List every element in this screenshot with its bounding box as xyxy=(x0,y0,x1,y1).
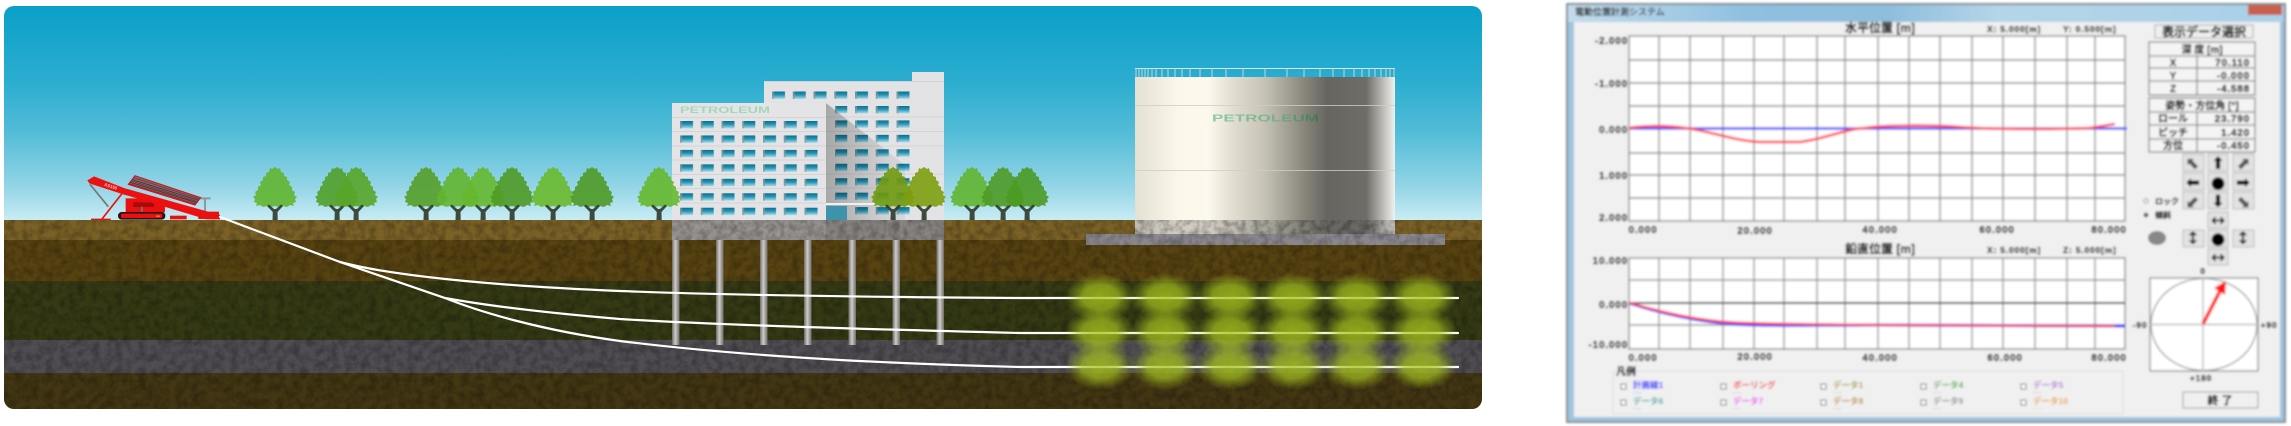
legend: series labels: データ9 xyxy=(1933,396,1964,406)
controls: arrow glyphs: ⬅ xyxy=(2186,173,2200,193)
chart 2: x axis labels: 0.000 xyxy=(1628,353,1658,364)
controls: arrow glyphs: ● xyxy=(2211,173,2225,193)
chart 1: x axis labels: 60.000 xyxy=(1979,225,2015,236)
panel: drilling cross-section scene xyxy=(4,6,1482,409)
side panel: mode radio options: 傾斜 xyxy=(2155,210,2171,220)
legend: series labels: 計画線1 xyxy=(1633,380,1664,390)
compass: bearing labels xyxy=(2133,266,2277,383)
side panel: attitude table: 方位 xyxy=(2163,139,2183,152)
legend: series sub-labels: ----- xyxy=(1833,390,1842,396)
side panel: attitude table: 23.790 xyxy=(2215,114,2250,125)
trees xyxy=(253,167,1049,220)
controls: arrow glyphs: ↕ xyxy=(2236,229,2250,249)
soil layer: dark green stratum xyxy=(4,281,1482,340)
building: office block on piles xyxy=(672,72,944,345)
compass: heading arrow xyxy=(2203,281,2226,324)
legend: series sub-labels: ----- xyxy=(1933,390,1942,396)
side panel: depth table: Z xyxy=(2170,84,2176,95)
storage tank xyxy=(1086,68,1445,245)
controls: arrow glyphs: ⬇ xyxy=(2211,192,2225,212)
legend: series labels: データ4 xyxy=(1933,380,1964,390)
chart 2: y axis labels xyxy=(1588,256,1628,351)
controls: arrow glyphs: ↔ xyxy=(2211,211,2225,231)
window: title bar xyxy=(1568,5,2284,22)
chart 2: x axis labels: 20.000 xyxy=(1737,352,1773,363)
chart 2: measured line xyxy=(1629,302,2115,326)
panel: monitoring software window screenshot xyxy=(1567,4,2285,422)
chart 1: measured line xyxy=(1629,124,2115,142)
well 1: upper bore xyxy=(220,217,1458,298)
chart 1: scale readout: X: 5.000[m] xyxy=(1987,24,2041,34)
compass: bearing labels: -90 xyxy=(2133,320,2147,330)
rig: model lettering: AS150 xyxy=(104,182,118,191)
chart: horizontal position xyxy=(1595,20,2127,237)
rig: crawler track xyxy=(118,212,165,220)
window: frame xyxy=(1567,4,2285,422)
controls: arrow glyphs: ⬋ xyxy=(2186,192,2200,212)
window: title text: 電動位置計測システム xyxy=(1575,6,1665,17)
legend: series labels: データ8 xyxy=(1833,396,1864,406)
legend: series sub-labels: ----- xyxy=(1833,406,1842,412)
tank: PETROLEUM label: PETROLEUM xyxy=(1212,112,1319,124)
legend: series labels: データ7 xyxy=(1733,396,1764,406)
compass dial xyxy=(2133,266,2277,383)
side panel: depth table: -4.588 xyxy=(2217,84,2250,95)
soil layer: grey rock xyxy=(4,340,1482,373)
legend: series labels: データ1 xyxy=(1833,380,1864,390)
controls: rotate icon xyxy=(2148,231,2166,245)
compass: bearing labels: +90 xyxy=(2261,320,2277,330)
chart 1: x axis labels: 0.000 xyxy=(1628,225,1658,236)
legend xyxy=(1613,365,2123,414)
legend: series sub-labels: ----- xyxy=(1733,390,1742,396)
legend: series sub-labels: ----- xyxy=(1933,406,1942,412)
tank: cylinder body xyxy=(1135,77,1395,220)
chart 1: second scale readout: Y: 0.500[m] xyxy=(2063,24,2117,34)
side panel: depth table: X xyxy=(2170,58,2177,69)
legend: checkboxes xyxy=(1621,384,2026,405)
legend: series sub-labels: ----- xyxy=(2033,406,2042,412)
tank: concrete plinth xyxy=(1135,220,1395,234)
chart 1: y axis labels: -1.000 xyxy=(1595,79,1628,90)
finish button xyxy=(2183,392,2258,408)
chart 2: x axis labels xyxy=(1628,352,2127,364)
chart 2: y axis labels: -10.000 xyxy=(1588,340,1628,351)
controls: arrow glyphs xyxy=(2186,154,2250,268)
chart 2: plot area xyxy=(1629,258,2125,349)
chart 1: title: 水平位置 [m] xyxy=(1845,20,1915,35)
controls: arrow glyphs: ➡ xyxy=(2236,173,2250,193)
chart 1: x axis labels: 40.000 xyxy=(1862,225,1898,236)
controls: arrow glyphs: ⬈ xyxy=(2236,154,2250,174)
legend: series sub-labels xyxy=(1633,390,2042,412)
chart 1: planned line xyxy=(1629,127,2127,130)
rig: body xyxy=(126,198,165,212)
legend: heading: 凡例 xyxy=(1616,365,1636,378)
legend: series labels: データ10 xyxy=(2033,396,2068,406)
controls: arrow glyphs: ⬊ xyxy=(2236,192,2250,212)
side panel: attitude table: 1.420 xyxy=(2221,128,2250,139)
drilling rig xyxy=(87,176,220,220)
building: rear wing xyxy=(764,72,944,220)
side panel: attitude table: ロール xyxy=(2158,114,2188,125)
chart 2: y axis labels: 0.000 xyxy=(1599,300,1628,311)
side panel: depth table xyxy=(2149,42,2255,95)
legend: series sub-labels: ----- xyxy=(2033,390,2042,396)
chart 2: second scale readout: Z: 5.000[m] xyxy=(2063,245,2117,255)
chart 2: y axis labels: 10.000 xyxy=(1593,256,1628,267)
side panel: display data selection button: 表示データ選択 xyxy=(2162,24,2246,39)
chart 1: x axis labels xyxy=(1628,225,2127,237)
side panel: depth table: 深 度 [m] xyxy=(2181,43,2223,56)
controls: arrow glyphs: ● xyxy=(2211,229,2225,249)
building: front windows xyxy=(680,121,819,216)
building: concrete foundation xyxy=(672,220,944,240)
side panel: mode radio options xyxy=(2144,196,2179,220)
finish button: 終 了 xyxy=(2207,393,2233,407)
building: entrance xyxy=(826,206,847,220)
tank: concrete base slab xyxy=(1086,234,1445,245)
oil-bearing glow zones xyxy=(1065,273,1457,390)
rig: rear support leg xyxy=(90,184,124,219)
side panel: depth table: -0.000 xyxy=(2217,71,2250,82)
rig: drill rod rack xyxy=(128,176,201,205)
legend: series labels: データ5 xyxy=(2033,380,2064,390)
compass: bearing labels: 0 xyxy=(2200,266,2206,276)
controls: arrow glyphs: ↔ xyxy=(2211,248,2225,268)
chart 1: y axis labels: 1.000 xyxy=(1599,171,1628,182)
chart 2: title: 鉛直位置 [m] xyxy=(1845,241,1915,256)
side panel: depth table: Y xyxy=(2170,71,2177,82)
rig: mast post xyxy=(200,198,211,212)
chart 2: scale readout: X: 5.000[m] xyxy=(1987,245,2041,255)
window: close button xyxy=(2248,5,2282,15)
side panel: attitude table xyxy=(2149,98,2255,152)
soil layer: topsoil xyxy=(4,220,1482,240)
legend: series sub-labels: ----- xyxy=(1633,390,1642,396)
window: client area xyxy=(1574,22,2280,417)
legend: series sub-labels: ----- xyxy=(1733,406,1742,412)
sky xyxy=(4,6,1482,220)
side panel: attitude table: 姿勢・方位角 [°] xyxy=(2165,99,2239,112)
side panel: attitude table: ピッチ xyxy=(2158,127,2188,139)
chart 2: planned line xyxy=(1629,303,2125,326)
horizontal drilled wells xyxy=(220,217,1458,367)
building: front wing xyxy=(672,103,764,220)
soil layer: deep earth xyxy=(4,373,1482,409)
side panel: mode radio options: ロック xyxy=(2155,196,2179,206)
chart 1: x axis labels: 20.000 xyxy=(1737,226,1773,237)
chart 1: y axis labels xyxy=(1595,36,1628,224)
rig: boom xyxy=(87,176,220,219)
chart 1: y axis labels: 2.000 xyxy=(1599,213,1628,224)
soil layer: brown earth xyxy=(4,240,1482,281)
tank: roof railing xyxy=(1135,68,1395,77)
legend: series sub-labels: ----- xyxy=(1633,406,1642,412)
chart 1: x axis labels: 80.000 xyxy=(2091,225,2127,236)
chart 1: y axis labels: 0.000 xyxy=(1599,125,1628,136)
chart: vertical position xyxy=(1588,241,2127,364)
legend: series labels: データ6 xyxy=(1633,396,1664,406)
chart 2: x axis labels: 40.000 xyxy=(1862,353,1898,364)
building: PETROLEUM sign: PETROLEUM xyxy=(680,105,770,115)
chart 2: x axis labels: 60.000 xyxy=(1987,353,2023,364)
side panel: view control buttons xyxy=(2148,154,2254,268)
legend: series labels xyxy=(1633,380,2068,406)
compass: bearing labels: +180 xyxy=(2190,373,2212,383)
legend: frame xyxy=(1613,371,2123,414)
chart 2: x axis labels: 80.000 xyxy=(2091,353,2127,364)
chart 1: plot area xyxy=(1629,36,2125,221)
legend: series labels: ボーリング xyxy=(1733,380,1776,390)
side panel: attitude table: -0.450 xyxy=(2217,141,2250,152)
building: foundation piles xyxy=(672,240,944,345)
well 2: middle bore xyxy=(340,262,1458,333)
well 3: lower bore xyxy=(445,298,1458,367)
side panel: depth table: 70.110 xyxy=(2215,58,2250,69)
controls: arrow glyphs: ↕ xyxy=(2186,229,2200,249)
chart 1: y axis labels: -2.000 xyxy=(1595,36,1628,47)
building: rear windows xyxy=(772,92,917,215)
controls: arrow glyphs: ⬆ xyxy=(2211,154,2225,174)
rig: front anchor xyxy=(170,212,219,219)
controls: arrow glyphs: ⬉ xyxy=(2186,154,2200,174)
